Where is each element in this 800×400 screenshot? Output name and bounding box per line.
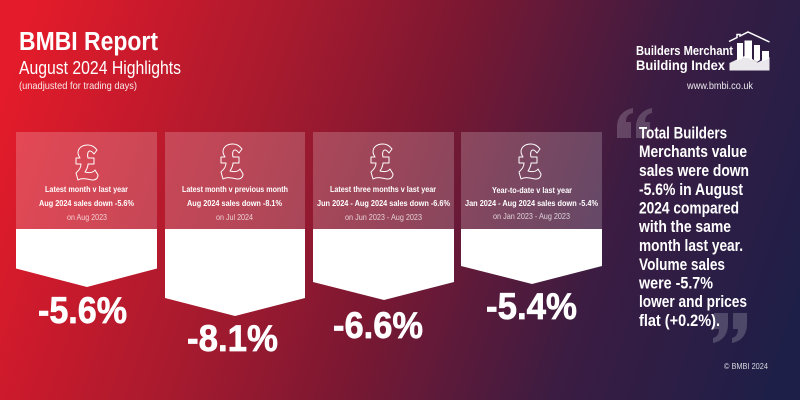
value: -5.4% (486, 285, 577, 327)
heading: BMBI Report (19, 28, 158, 56)
website: www.bmbi.co.uk (686, 80, 754, 92)
card 3: latest three months v last year (313, 132, 454, 346)
card panel (313, 132, 454, 229)
card detail: Aug 2024 sales down -5.6% (39, 198, 134, 208)
card heading: Year-to-date v last year (492, 185, 573, 195)
quote text: flat (+0.2%). (639, 312, 720, 330)
value: -6.6% (333, 304, 423, 346)
card comparison: on Jun 2023 - Aug 2023 (345, 212, 422, 222)
value: -8.1% (187, 317, 278, 359)
icon: pound (221, 144, 243, 179)
card panel (461, 132, 602, 229)
card panel (16, 132, 157, 229)
quote text (638, 124, 749, 330)
quote text: month last year. (639, 237, 743, 255)
white arrow bar (313, 229, 454, 300)
icon: opening quote mark (617, 108, 652, 138)
card heading: Latest month v previous month (182, 184, 288, 194)
card 2: latest month v previous month (165, 132, 305, 359)
card comparison: on Aug 2023 (67, 212, 107, 222)
quote text: -5.6% in August (639, 181, 744, 199)
logo icon: bars (737, 40, 769, 62)
icon: pound (371, 144, 393, 179)
quote text: lower and prices (639, 293, 747, 311)
quote text: Volume sales (639, 256, 725, 274)
note: (unadjusted for trading days) (19, 80, 137, 92)
card heading: Latest three months v last year (330, 184, 437, 194)
card 4: year-to-date v last year (461, 132, 602, 327)
icon: pound (76, 145, 98, 180)
logo icon: roof (729, 32, 770, 42)
icon: pound (519, 144, 541, 179)
quote text: with the same (638, 218, 731, 236)
card heading: Latest month v last year (45, 184, 129, 194)
quote text: Total Builders (639, 124, 727, 142)
logo (636, 32, 770, 92)
logo name second line: Building Index (636, 57, 725, 73)
copyright: © BMBI 2024 (724, 361, 768, 371)
value: -5.6% (38, 289, 127, 331)
title block (19, 28, 181, 92)
card comparison: on Jan 2023 - Aug 2023 (493, 211, 570, 221)
card detail: Aug 2024 sales down -8.1% (187, 198, 282, 208)
logo icon: base (730, 55, 770, 70)
icon: closing quote mark (713, 313, 747, 343)
card detail: Jan 2024 - Aug 2024 sales down -5.4% (465, 198, 598, 208)
quote text: sales were down (639, 162, 749, 180)
subheading: August 2024 Highlights (19, 58, 181, 78)
quote text: were -5.7% (638, 274, 713, 292)
white arrow bar (16, 229, 157, 287)
card 1: latest month v last year (16, 132, 157, 331)
white arrow bar (165, 229, 305, 316)
card panel (165, 132, 305, 229)
quote text: 2024 compared (639, 200, 739, 218)
white arrow bar (461, 229, 602, 284)
card detail: Jun 2024 - Aug 2024 sales down -6.6% (317, 198, 450, 208)
logo name: Builders Merchant (636, 44, 734, 58)
card comparison: on Jul 2024 (216, 212, 253, 222)
quote text: Merchants value (639, 143, 747, 161)
